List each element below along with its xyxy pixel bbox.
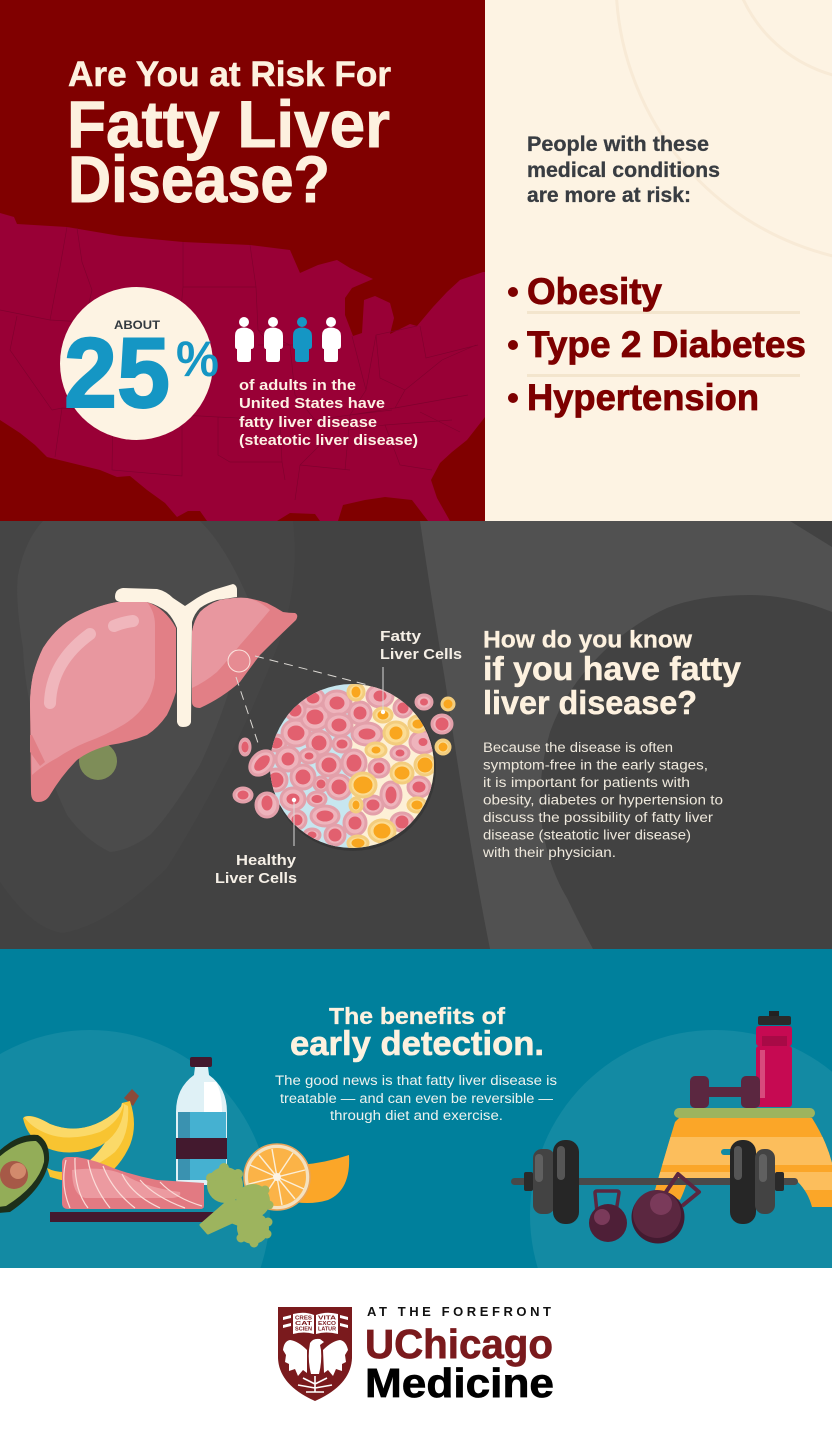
barbell <box>511 1140 798 1224</box>
panel: benefits of early detection <box>0 949 832 1268</box>
text: conditions intro: are more at risk: <box>527 184 691 207</box>
icon: four people, one highlighted <box>235 317 341 362</box>
text: explanation: with their physician. <box>482 845 616 860</box>
open book: CAT <box>295 1321 312 1327</box>
title: Fatty Liver <box>67 87 390 161</box>
map: United States <box>0 213 485 521</box>
heading: benefits: early detection. <box>290 1025 544 1063</box>
title: Disease? <box>68 142 330 216</box>
small kettlebell <box>589 1191 627 1242</box>
wordmark: UChicago <box>365 1321 553 1367</box>
heading: how do you know: liver disease? <box>483 684 697 721</box>
text: adults statistic: of adults in the <box>239 378 356 394</box>
avocado <box>0 1135 49 1213</box>
text: explanation: symptom-free in the early stages, <box>483 758 708 772</box>
text: good news <box>275 1073 557 1123</box>
list: risk conditions <box>508 271 806 418</box>
text: explanation: Because the disease is often <box>483 740 673 755</box>
illustration: exercise equipment <box>511 1011 832 1244</box>
text: explanation: discuss the possibility of fatty liver <box>483 810 714 825</box>
text: adults statistic: fatty liver disease <box>239 415 377 431</box>
list: risk conditions: Obesity <box>527 271 662 312</box>
orange <box>244 1144 310 1210</box>
open book: VITA <box>318 1316 337 1322</box>
liver highlights <box>50 634 90 703</box>
open book <box>283 1313 348 1334</box>
illustration: liver cells <box>234 684 454 851</box>
text: explanation: obesity, diabetes or hypertension to <box>483 792 723 808</box>
banana <box>23 1089 139 1183</box>
liver left lobe <box>192 598 297 708</box>
large kettlebell <box>632 1174 699 1244</box>
illustration: healthy food <box>0 1057 349 1248</box>
illustration: liver <box>30 584 297 802</box>
text: conditions intro: medical conditions <box>527 159 720 182</box>
mango <box>299 1155 350 1203</box>
callout: healthy liver cells: Liver Cells <box>215 871 297 887</box>
open book: EXCO <box>318 1321 336 1327</box>
panel: how do you know <box>0 521 832 949</box>
text: good news: through diet and exercise. <box>330 1108 503 1123</box>
dumbbell <box>690 1076 760 1108</box>
text: good news: treatable — and can even be reversible — <box>280 1091 554 1106</box>
open book: SCIEN <box>295 1326 312 1332</box>
callout: healthy liver cells: Healthy <box>236 853 296 869</box>
list: risk conditions: Type 2 Diabetes <box>527 324 806 365</box>
zoom indicator: dashed connectors <box>228 650 368 743</box>
text: adults statistic: United States have <box>239 396 385 412</box>
wordmark: AT THE FOREFRONT <box>367 1304 551 1319</box>
heading: how do you know: if you have fatty <box>483 650 742 687</box>
number: 25: 25 <box>64 317 170 428</box>
text: explanation: disease (steatotic liver disease) <box>483 828 691 842</box>
heading: how do you know: How do you know <box>483 626 692 654</box>
text: adults statistic <box>239 378 418 449</box>
heading: benefits <box>290 1003 544 1063</box>
callout: fatty liver cells: Fatty <box>380 629 421 645</box>
list: risk conditions: Hypertension <box>527 377 759 418</box>
text: conditions intro: People with these <box>527 133 709 156</box>
number: percent sign: % <box>176 331 219 387</box>
text: adults statistic: (steatotic liver disease) <box>239 433 418 449</box>
heading: benefits: The benefits of <box>329 1003 505 1029</box>
text: explanation: it is important for patients with <box>483 775 690 790</box>
panel: risk statistic <box>0 0 485 521</box>
footer: logo <box>0 1268 832 1441</box>
water bottle <box>176 1057 227 1185</box>
salmon <box>62 1157 204 1209</box>
label: about: ABOUT <box>114 320 160 332</box>
liver ligament <box>115 584 237 727</box>
broccoli <box>201 1163 274 1248</box>
heading: how do you know <box>484 630 742 714</box>
text: explanation <box>482 740 723 860</box>
callout circle: about 25% <box>60 287 219 440</box>
callout: fatty liver cells <box>380 629 462 714</box>
callout: fatty liver cells: Liver Cells <box>380 647 462 663</box>
wordmark <box>365 1304 554 1406</box>
text: conditions intro <box>527 133 720 207</box>
sports bottle <box>756 1011 792 1107</box>
title: Are You at Risk For <box>68 55 391 94</box>
open book: CRES <box>295 1316 313 1322</box>
panel: medical conditions <box>485 0 832 521</box>
cutting board <box>50 1212 215 1222</box>
title <box>68 60 391 203</box>
step stool <box>650 1108 832 1208</box>
text: good news: The good news is that fatty liver disease is <box>275 1073 557 1088</box>
callout: healthy liver cells <box>215 798 297 887</box>
wordmark: Medicine <box>365 1360 554 1406</box>
liver right lobe <box>30 602 176 802</box>
gallbladder <box>79 742 117 780</box>
icon: shield crest <box>278 1307 352 1401</box>
open book: LATUR <box>318 1326 336 1332</box>
phoenix <box>283 1339 348 1392</box>
